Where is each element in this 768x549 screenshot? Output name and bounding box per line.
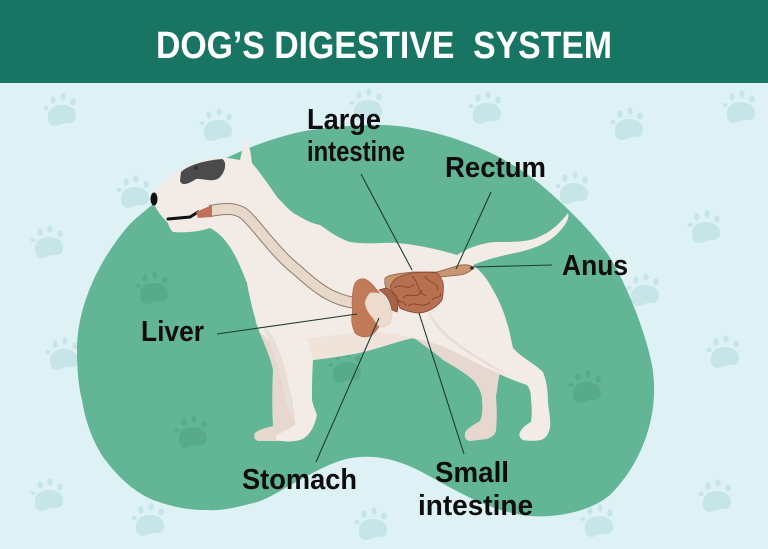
esophagus <box>196 205 372 303</box>
liver <box>352 279 385 337</box>
label: rectum: Rectum <box>445 152 546 184</box>
large intestine <box>385 265 473 300</box>
mouth <box>168 212 198 219</box>
front leg shading <box>262 325 292 420</box>
eye patch <box>180 159 225 184</box>
chest shading <box>308 332 413 360</box>
far front leg <box>254 320 295 441</box>
dog illustration <box>150 137 568 442</box>
nose <box>150 192 158 206</box>
label: stomach: Stomach <box>242 464 357 496</box>
eye <box>194 166 198 170</box>
stomach <box>365 293 392 327</box>
title banner <box>0 0 768 83</box>
thigh shading <box>428 310 512 377</box>
title: DOG’S DIGESTIVE SYSTEM <box>156 25 612 67</box>
dog body <box>152 137 568 442</box>
stomach band <box>379 288 398 312</box>
small intestine <box>390 272 443 313</box>
far hind leg <box>400 325 500 441</box>
background paw prints <box>30 88 755 540</box>
label: large: Large <box>307 104 381 136</box>
anus <box>470 266 474 270</box>
label: intestine: intestine <box>307 136 405 168</box>
label: intestine (small): intestine <box>418 490 533 522</box>
label: liver: Liver <box>141 316 204 348</box>
green blob <box>77 125 654 516</box>
label lines <box>217 174 552 462</box>
label: anus: Anus <box>562 250 628 282</box>
paw prints on green blob <box>135 271 601 448</box>
label: small: Small <box>435 457 509 489</box>
